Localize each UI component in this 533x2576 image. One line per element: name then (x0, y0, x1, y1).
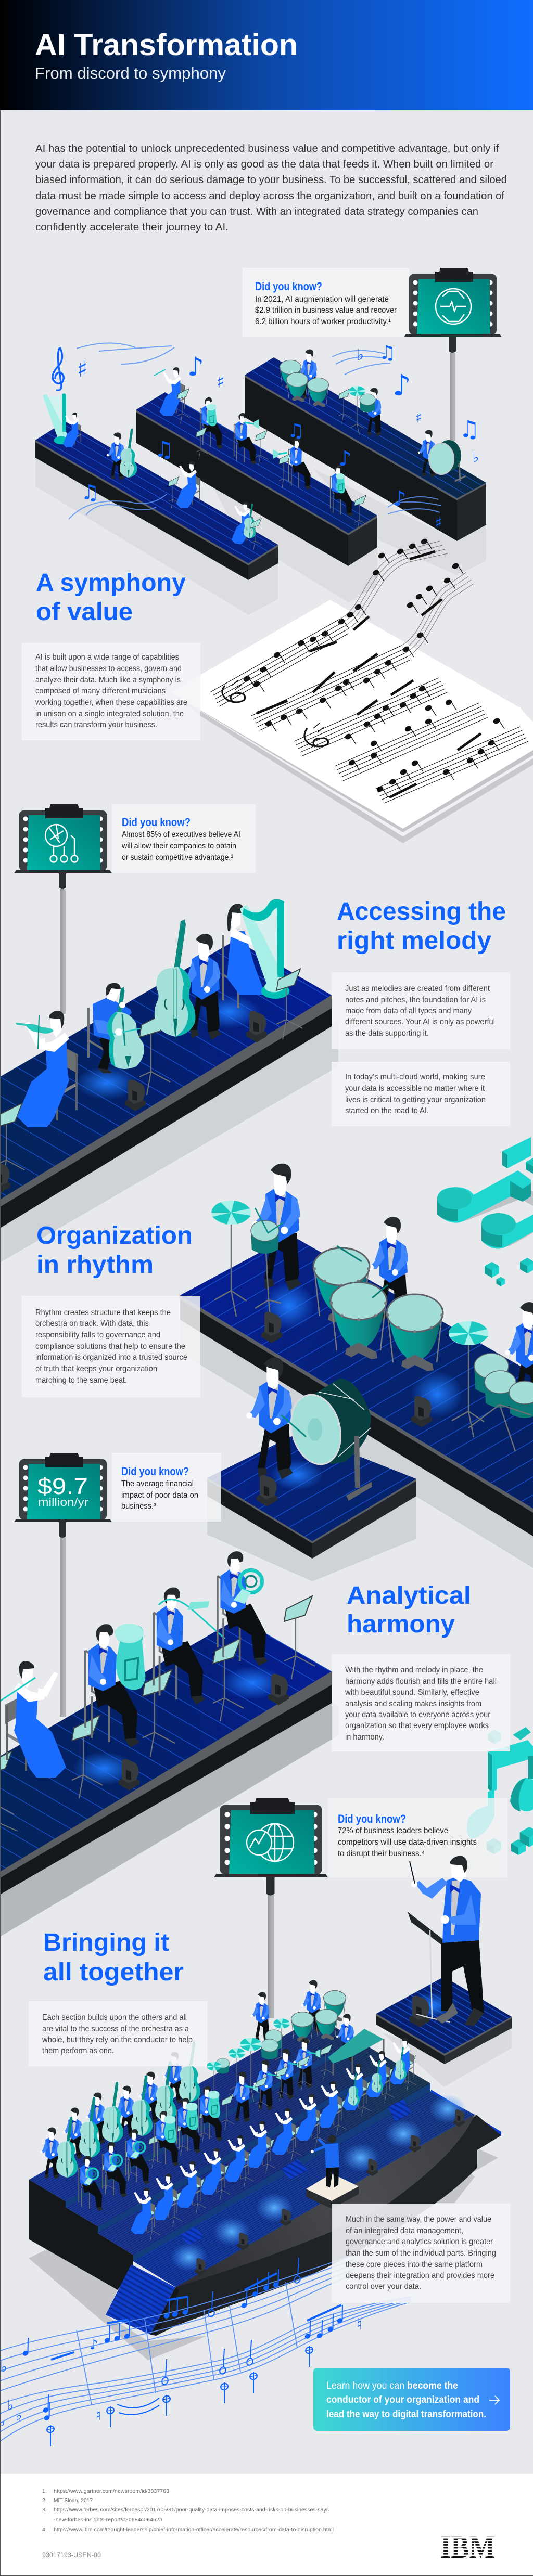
fact text: business.³ (121, 1502, 156, 1511)
notes (243, 538, 504, 797)
text panel: melodies: Just as melodies are created from different (345, 984, 490, 993)
intro paragraph (35, 143, 507, 233)
text panel: multi-cloud: started on the road to AI. (345, 1106, 429, 1115)
stat: 9.7 million per year: million/yr (38, 1496, 88, 1509)
voxel music notes (437, 1137, 533, 1286)
heading: Did you know? (338, 1812, 406, 1825)
text panel: harmony: with beautiful sound. Similarly, effective (345, 1688, 479, 1697)
call to action button: lead the way to digital transformation. (326, 2409, 486, 2420)
voxel notes lower right (467, 1727, 533, 1855)
tier lips (66, 2052, 430, 2261)
text panel: each section (29, 2001, 207, 2066)
platform 1: strings (35, 393, 278, 580)
percussion section (207, 1980, 384, 2105)
music glyphs: ♪ (187, 352, 204, 382)
pole of music stand 2 (60, 889, 66, 1014)
text panel: symphony: that allow businesses to access, govern and (35, 664, 182, 673)
call to action button: become the (407, 2380, 458, 2391)
text panel: harmony: in harmony. (345, 1733, 384, 1742)
tuba player (85, 1624, 139, 1747)
music stand 1 (404, 268, 502, 353)
text panel: multi-cloud: In today’s multi-cloud world, making sure (345, 1073, 485, 1081)
platform 2: brass (136, 367, 377, 566)
stage light (257, 1475, 277, 1506)
music glyphs: ♭ (357, 346, 364, 364)
accidentals: ♪ (90, 2337, 98, 2353)
text panel: each section: Each section builds upon the others and all (42, 2013, 187, 2022)
flute and violin row (131, 2038, 414, 2234)
stage lights (125, 1080, 146, 1111)
call to action button (313, 2368, 510, 2431)
heading: analytical harmony (347, 1582, 471, 1638)
trombone player (234, 413, 257, 465)
text panel: same way: control over your data. (346, 2282, 421, 2291)
text panel: rhythm: Rhythm creates structure that keeps the (35, 1308, 171, 1317)
snare player (252, 1164, 301, 1291)
text panel: harmony (332, 1654, 510, 1751)
fact text: The average financial (121, 1479, 194, 1488)
violin player (0, 1011, 78, 1182)
text panel: harmony: organization so that every employee works (345, 1721, 489, 1730)
music glyphs: ♫ (459, 416, 479, 443)
music glyphs: ♫ (379, 342, 396, 364)
text panel: multi-cloud: lives is critical to getting your organization (345, 1096, 486, 1104)
stage lights (119, 1759, 139, 1791)
heading: organization in rhythm (36, 1222, 193, 1279)
call to action button: conductor of your organization and (326, 2394, 479, 2405)
heading: organization in rhythm: Organization (36, 1222, 193, 1250)
pole of music stand 1 (450, 353, 455, 441)
callout panel: did you know 4 (214, 1798, 507, 1895)
text panel: rhythm: marching to the same beat. (35, 1376, 127, 1385)
text panel: same way: of an integrated data management, (346, 2226, 463, 2235)
heading: organization in rhythm: in rhythm (36, 1251, 154, 1279)
upper staff (0, 2255, 354, 2391)
orchestra shadow (29, 2148, 498, 2360)
music glyphs: ♪ (393, 487, 407, 511)
bass drum (307, 1379, 371, 1464)
beams and ties (51, 2273, 341, 2415)
sources: 3. (42, 2507, 47, 2513)
harmony stage shadow (0, 1703, 338, 1937)
tuba player 2 (331, 465, 353, 517)
intro paragraph: biased information, it can do serious damage to your business. To be successful, scattered and siloed (35, 174, 507, 186)
sources (42, 2488, 334, 2533)
base wall (29, 2180, 133, 2290)
intro paragraph: governance and compliance that you can trust. With an integrated data strategy companies can (35, 206, 478, 217)
accidentals: ♮ (96, 2406, 101, 2424)
document code: 93017193-USEN-00 (42, 2551, 101, 2559)
text panel: symphony (22, 643, 200, 740)
accidentals (0, 2315, 362, 2430)
fact text: 6.2 billion hours of worker productivity.¹ (255, 317, 391, 326)
text panel: symphony: analyze their data. Much like a symphony is (35, 676, 181, 685)
icon: circuit aperture (45, 825, 78, 862)
cello player (232, 501, 253, 544)
text panel: symphony: working together, when these capabilities are (35, 698, 187, 707)
accidentals: ♭ (0, 2358, 7, 2376)
conductor platform (376, 1912, 512, 2087)
heading: accessing the right melody: right melody (337, 927, 491, 955)
heading: analytical harmony: Analytical (347, 1582, 471, 1609)
heading: accessing the right melody: Accessing the (337, 898, 506, 925)
text panel: same way (332, 2204, 510, 2303)
grey curved strip (176, 2115, 475, 2287)
intro paragraph: data must be made simple to access and deploy across the organization, and built on a foundation of (35, 190, 504, 202)
light glows (170, 2094, 466, 2272)
timpani (313, 1248, 370, 1325)
text panel: same way: these core pieces into the same platform (346, 2260, 483, 2269)
text panel: harmony: harmony adds flourish and fills the entire hall (345, 1677, 497, 1686)
music stand 2 (14, 804, 112, 889)
icon: globe with chart (247, 1824, 294, 1861)
text panel: same way: governance and analytics solution is greater (346, 2237, 493, 2246)
mini conductor (326, 2159, 339, 2187)
fact text: competitors will use data-driven insights (338, 1838, 477, 1847)
horn player (218, 1551, 268, 1666)
icon: treble clef (53, 347, 64, 390)
rhythm stage (180, 1164, 533, 1536)
fact text: 72% of business leaders believe (338, 1826, 448, 1835)
double bass player (107, 432, 125, 480)
stage light glows (75, 1066, 138, 1100)
accidentals: ♭ (16, 2408, 22, 2424)
tier surface (29, 2017, 430, 2261)
flute player (0, 1661, 66, 1826)
sources: 4. (42, 2527, 47, 2533)
music glyphs: ♯ (77, 356, 87, 382)
text panel: symphony: in unison on a single integrated solution, the (35, 710, 184, 718)
front row music stands (147, 2056, 417, 2240)
text panel: same way: than the sum of the individual parts. Bringing (346, 2249, 496, 2258)
double bass row (40, 2041, 200, 2180)
text panel: each section: are vital to the success of the orchestra as a (42, 2025, 189, 2033)
stage lights (195, 2109, 465, 2275)
intro paragraph: confidently accelerate their journey to AI. (35, 222, 229, 233)
music stand 4 (214, 1798, 328, 1895)
rhythm stage shadow (180, 1320, 533, 1568)
fact text: to disrupt their business.⁴ (338, 1849, 425, 1858)
heading: a symphony of value: A symphony (36, 569, 186, 597)
conductor podium (306, 2135, 359, 2209)
callout panel: did you know 2 (14, 804, 256, 889)
right drummer (505, 1302, 533, 1408)
text panel: melodies: made from data of all types and many (345, 1007, 472, 1015)
flying music notes (53, 343, 441, 519)
conductor score stand (408, 1912, 448, 1946)
melody stage (0, 899, 332, 1228)
callout panel: did you know 3 (14, 1453, 221, 1538)
text panel: melodies: notes and pitches, the foundation for AI is (345, 996, 486, 1004)
harp player (223, 899, 289, 1008)
trumpet player (289, 438, 311, 490)
text panel: multi-cloud: your data is accessible no matter where it (345, 1084, 485, 1093)
sources: 1. (42, 2488, 47, 2494)
text panel: rhythm: responsibility falls to governance and (35, 1331, 160, 1339)
cello player (88, 983, 144, 1073)
fact text (121, 830, 240, 862)
heading: bringing it all together: Bringing it (43, 1929, 169, 1956)
arrow (489, 2396, 499, 2404)
apron (133, 2091, 475, 2287)
pole of music stand 4 (268, 1894, 274, 2018)
music stand (72, 1715, 103, 1798)
melody stage shadow (0, 1020, 338, 1263)
fact text: impact of poor data on (121, 1491, 198, 1500)
music glyphs: ♫ (287, 420, 304, 442)
music stand 3 (14, 1453, 112, 1538)
shadow (207, 1496, 416, 1581)
text panel: multi-cloud (332, 1062, 510, 1126)
heading: Did you know? (255, 280, 322, 293)
heading: bringing it all together: all together (43, 1959, 184, 1986)
text panel: melodies: different sources. Your AI is only as powerful (345, 1017, 495, 1026)
text panel: symphony: composed of many different musicians (35, 687, 166, 695)
text panel: symphony: AI is built upon a wide range of capabilities (35, 653, 179, 662)
fact text (338, 1826, 477, 1858)
fact text (255, 295, 397, 326)
tuba player (200, 397, 223, 449)
title: AI Transformation (35, 28, 298, 62)
bass drum (436, 440, 461, 471)
header banner (0, 0, 533, 110)
fact text: Almost 85% of executives believe AI (122, 830, 240, 839)
call to action button: Learn how you can (326, 2380, 404, 2391)
text panel: symphony: results can transform your business. (35, 720, 157, 729)
heading: analytical harmony: harmony (347, 1611, 455, 1638)
callout panel: did you know 1 (243, 268, 502, 441)
text panel: same way: deepens their integration and provides more (346, 2271, 494, 2280)
music glyphs: ♭ (473, 450, 479, 466)
tuba and horn row (79, 2086, 223, 2211)
text panel: melodies (332, 972, 510, 1049)
timpani and percussion players (298, 349, 318, 400)
music glyphs: ♯ (435, 514, 442, 532)
text panel: harmony: analysis and scaling makes insights from (345, 1699, 481, 1708)
music glyphs: ♯ (415, 410, 422, 426)
music stands (102, 2044, 334, 2195)
platform 3: percussion (245, 349, 486, 541)
pole of music stand 3 (60, 1537, 66, 1717)
text panel: each section: whole, but they rely on the conductor to help (42, 2036, 193, 2044)
music glyphs: ♫ (154, 436, 174, 462)
trombone player (154, 1588, 205, 1705)
music glyphs: ♪ (338, 447, 352, 471)
left stairs (106, 2264, 175, 2335)
text panel: each section: them perform as one. (42, 2046, 114, 2055)
heading: accessing the right melody (337, 898, 506, 955)
bass drum platform (207, 1358, 416, 1581)
staff lines (211, 619, 528, 803)
heading: a symphony of value: of value (36, 598, 133, 626)
lower staff (0, 2297, 411, 2441)
accidentals: ♭ (7, 2398, 14, 2413)
treble clefs (222, 680, 328, 747)
heading: Did you know? (121, 1465, 189, 1478)
music glyphs: ♫ (81, 481, 99, 505)
orchestra stage (29, 1980, 501, 2336)
sources: -new-forbes-insights-report/#20684c06452b (54, 2517, 162, 2523)
subtitle: From discord to symphony (35, 64, 226, 82)
music glyphs (77, 342, 479, 532)
text panel: melodies: as the data supporting it. (345, 1029, 429, 1038)
stage lights (261, 1312, 282, 1343)
fact text: will allow their companies to obtain (121, 842, 236, 851)
fact text: or sustain competitive advantage.² (122, 853, 233, 862)
blue notes (22, 2258, 344, 2446)
conductor (410, 1856, 484, 2026)
IBM logo: IBM (440, 2530, 495, 2565)
right stairs (431, 2090, 501, 2136)
heading: Did you know? (122, 816, 191, 829)
sources: https://www.gartner.com/newsroom/id/3837763 (54, 2488, 169, 2494)
sources: MIT Sloan, 2017 (54, 2497, 93, 2504)
accidentals: ♮ (357, 2315, 362, 2334)
heading: bringing it all together (43, 1929, 184, 1986)
flute player (159, 367, 185, 416)
beams (257, 551, 481, 797)
timpani player (369, 1217, 409, 1323)
harmony stage (0, 1551, 332, 1895)
violin (16, 1023, 54, 1034)
text panel: rhythm: of truth that keeps your organization (35, 1364, 157, 1373)
icon: AI pulse circle (436, 289, 471, 324)
text panel: rhythm (22, 1296, 200, 1397)
violin player (176, 461, 200, 508)
sheet music paper (170, 538, 533, 843)
section 1 platform shadows (35, 458, 486, 615)
sources: 2. (42, 2497, 47, 2504)
intro paragraph: AI has the potential to unlock unprecedented business value and competitive advantage, but only if (35, 143, 499, 154)
heading: a symphony of value (36, 569, 186, 626)
text panel: harmony: With the rhythm and melody in place, the (345, 1666, 483, 1675)
fact text: In 2021, AI augmentation will generate (255, 295, 389, 304)
music glyphs: ♪ (392, 369, 411, 403)
fact text: $2.9 trillion in business value and recover (255, 306, 397, 315)
sources: https://www.ibm.com/thought-leadership/chief-information-officer/accelerate/resources/from-data-to-disruption.html (54, 2527, 334, 2533)
tier stairs (139, 2100, 411, 2245)
double bass player (181, 934, 221, 1040)
fact text (121, 1479, 198, 1511)
footer (0, 2474, 533, 2576)
xylophone (328, 2029, 384, 2064)
intro paragraph: your data is prepared properly. AI is only as good as the data that feeds it. When built on limited or (35, 159, 493, 170)
text panel: rhythm: orchestra on track. With data, this (35, 1319, 149, 1328)
bar lines (77, 2282, 297, 2405)
sources: https://www.forbes.com/sites/forbespr/2017/05/31/poor-quality-data-imposes-costs-and-risks-on-businesses-says (54, 2507, 329, 2513)
text panel: harmony: your data available to everyone across your (345, 1710, 490, 1719)
stat: 9.7 million per year (37, 1474, 88, 1509)
text panel: rhythm: information is organized into a trusted source (35, 1353, 187, 1362)
blue music staves (0, 2255, 411, 2446)
bass drum player (246, 1358, 293, 1479)
text panel: rhythm: compliance solutions that help to ensure the (35, 1342, 185, 1351)
front wall (156, 2115, 501, 2336)
text panel: same way: Much in the same way, the power and value (346, 2215, 491, 2224)
stat: 9.7 million per year: $9.7 (37, 1474, 88, 1499)
harp (240, 899, 289, 999)
music glyphs: ♯ (217, 372, 224, 392)
harp (43, 393, 69, 444)
trumpet row (231, 2038, 320, 2122)
